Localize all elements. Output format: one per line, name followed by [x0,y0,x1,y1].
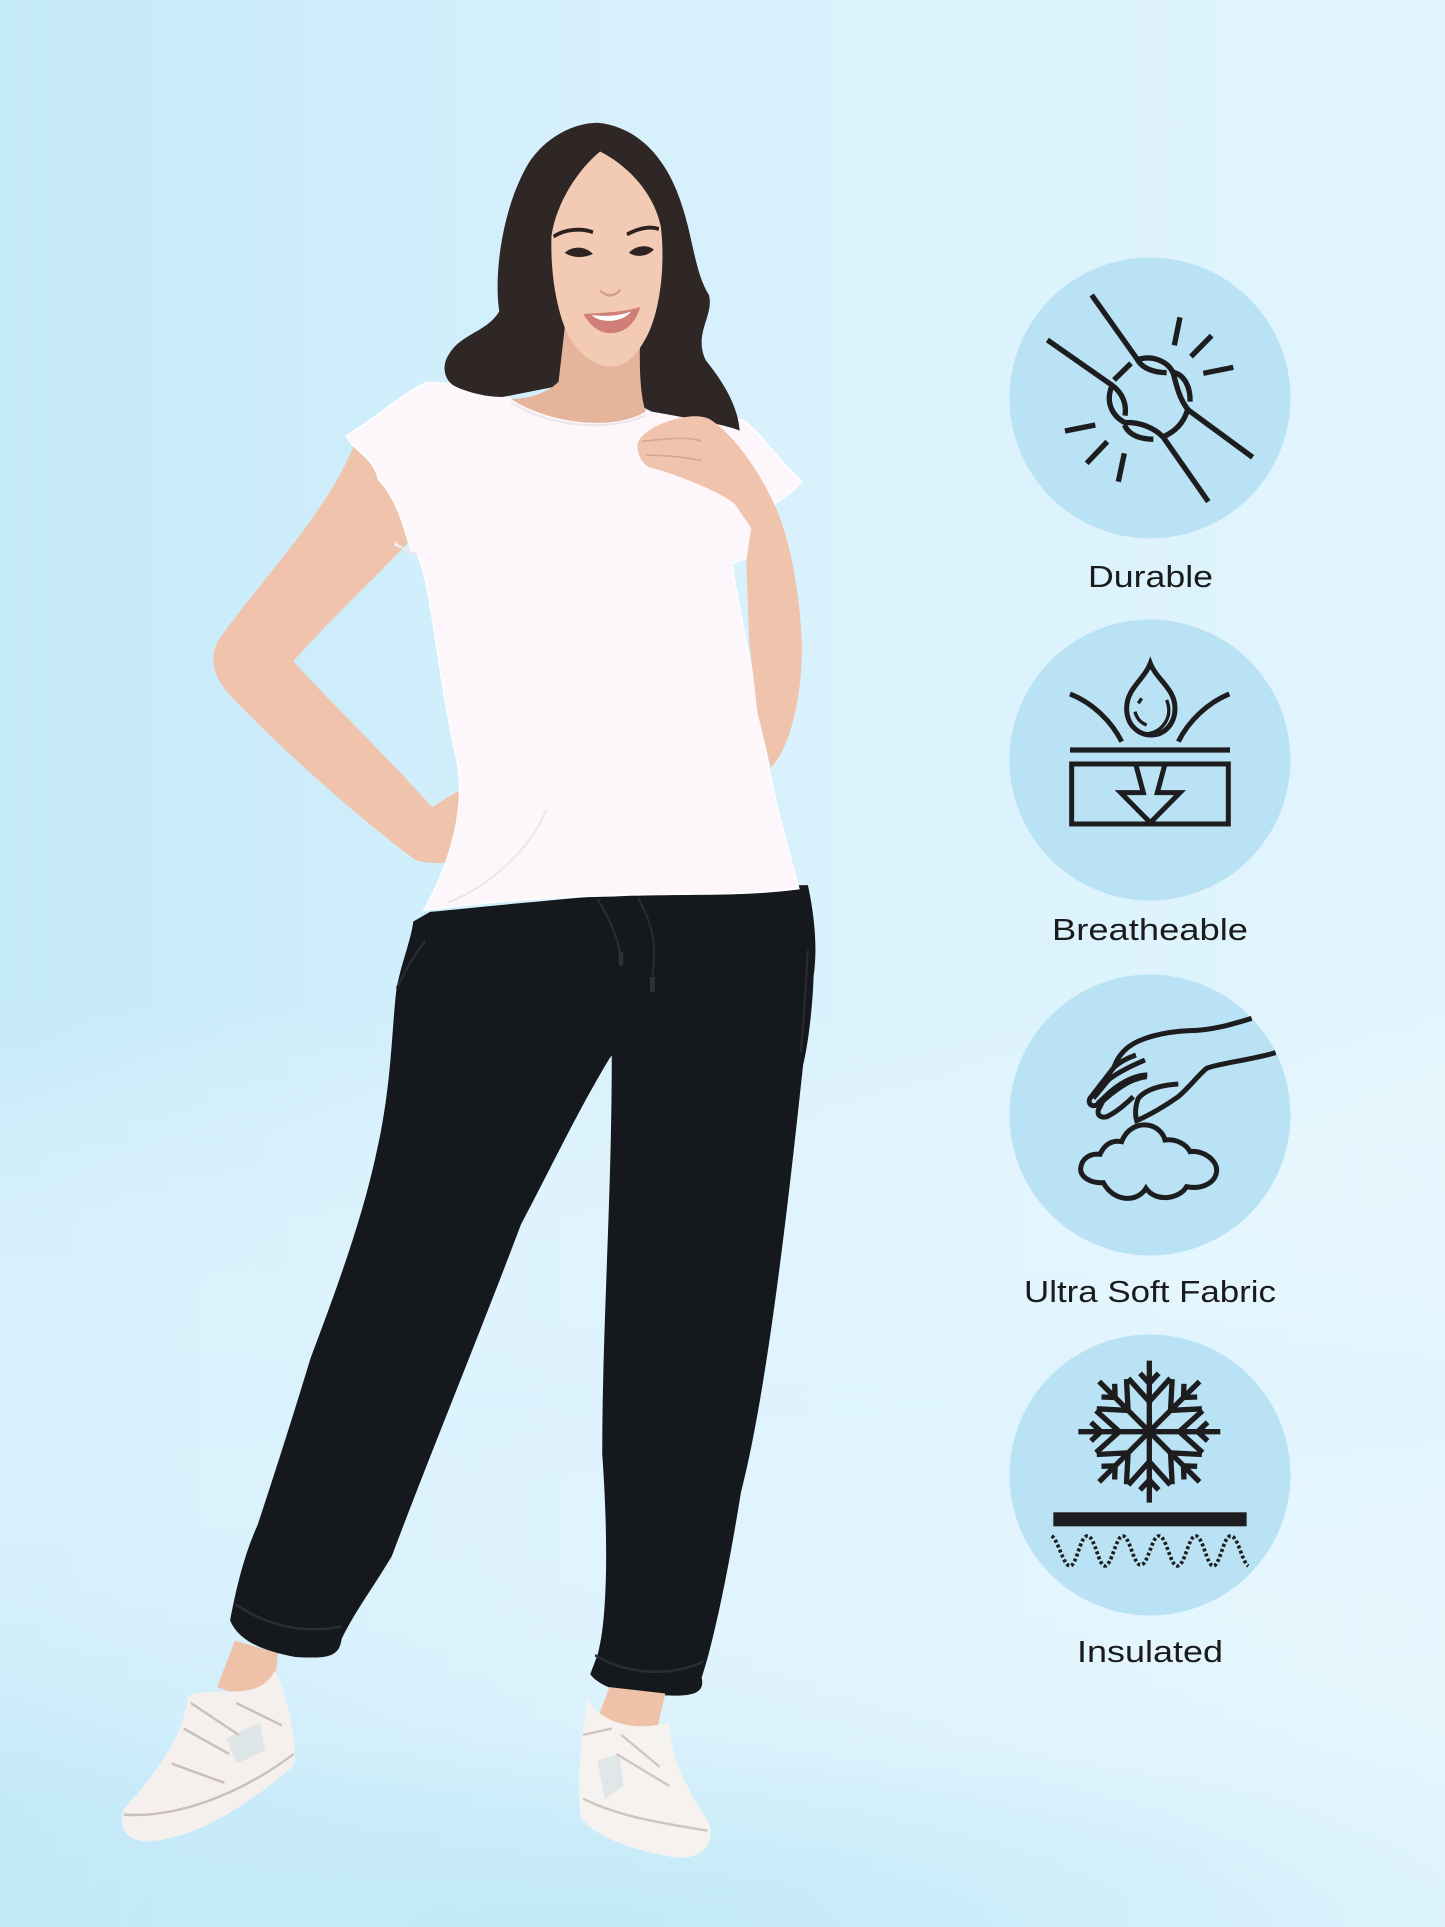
right ankle [597,1687,665,1738]
icon: hand touching cloud [1081,1018,1276,1198]
circle background [1010,258,1290,538]
left arm and hand [213,447,546,863]
hair [445,123,740,431]
t-shirt [346,383,802,910]
left sneaker [122,1671,295,1841]
circle background [1010,1334,1290,1616]
icon: water drop over fabric [1070,663,1230,824]
icon: knotted threads [1047,295,1253,502]
right arm and hand [637,416,802,768]
label: Breatheable [1052,912,1248,947]
label: Durable [1088,559,1213,594]
right sneaker [579,1697,711,1858]
feature: Durable [1010,258,1290,594]
feature: Breatheable [1010,620,1290,947]
facial features [554,228,659,333]
icon: snowflake over insulation layer [1052,1361,1248,1566]
feature: Ultra Soft Fabric [1010,974,1290,1309]
model photo illustration [122,123,815,1858]
feature: Insulated [1010,1334,1290,1669]
joggers [230,885,815,1696]
label: Ultra Soft Fabric [1024,1274,1276,1309]
face [551,151,662,367]
circle background [1010,620,1290,900]
circle background [1010,974,1290,1256]
neck [511,328,646,423]
label: Insulated [1077,1634,1223,1669]
left ankle [217,1640,278,1706]
